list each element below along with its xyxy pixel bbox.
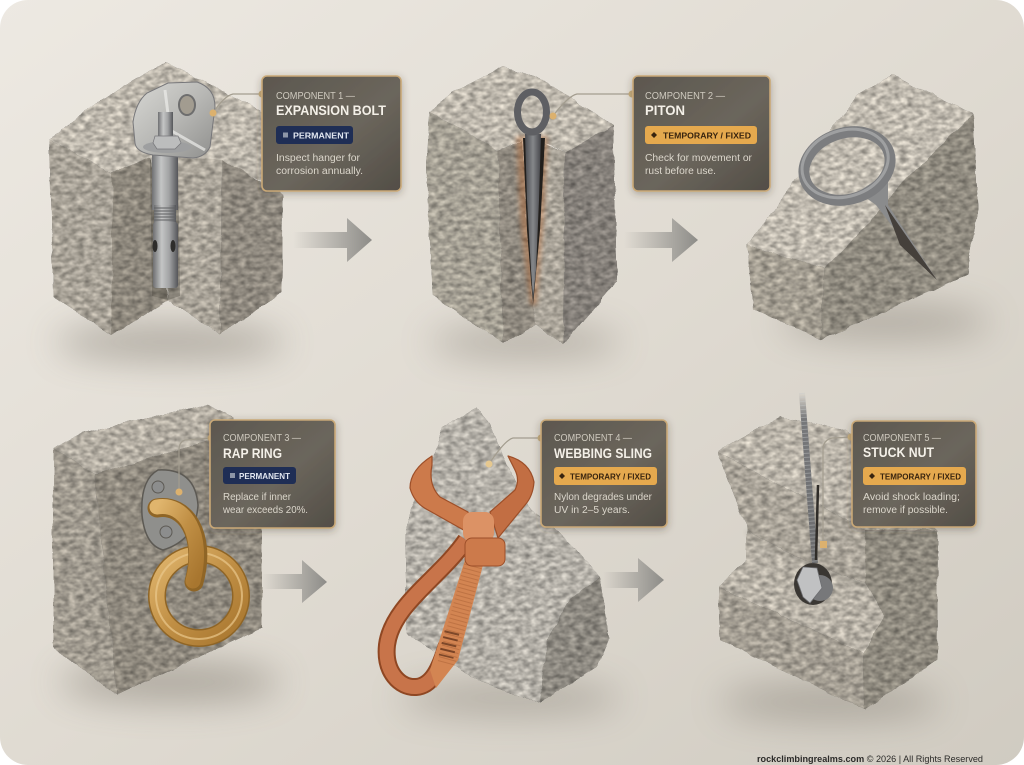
rock shadow bbox=[430, 326, 620, 358]
callout: piton: PITON bbox=[645, 102, 685, 118]
hanging loop bbox=[387, 540, 466, 687]
leader line bbox=[486, 434, 544, 468]
badge: temporary: TEMPORARY / FIXED bbox=[880, 472, 961, 482]
callout: webbing sling: WEBBING SLING bbox=[554, 445, 652, 461]
arrow: step 4 to 5 bbox=[603, 558, 664, 602]
callout: webbing sling: Nylon degrades under bbox=[554, 492, 653, 503]
icon: gold ring bbox=[156, 506, 242, 639]
rock shadow bbox=[400, 682, 620, 714]
callout: stuck nut: remove if possible. bbox=[863, 505, 948, 516]
icon: piton bbox=[518, 92, 546, 298]
callout: rap ring bbox=[210, 420, 335, 528]
callout: rap ring: wear exceeds 20%. bbox=[222, 505, 308, 516]
badge: temporary: TEMPORARY / FIXED bbox=[663, 130, 751, 140]
leader line bbox=[820, 434, 854, 548]
leader line bbox=[550, 90, 636, 120]
knot bbox=[463, 512, 494, 542]
rock shadow bbox=[55, 324, 285, 360]
callout: piton: COMPONENT 2 — bbox=[645, 91, 725, 102]
component 2: piton in crack bbox=[427, 67, 770, 358]
callout: webbing sling: COMPONENT 4 — bbox=[554, 433, 632, 444]
callout: stuck nut: COMPONENT 5 — bbox=[863, 433, 941, 444]
rust stain bbox=[516, 136, 548, 305]
crack shadow bbox=[747, 532, 865, 585]
granite block bbox=[427, 67, 617, 344]
granite block bbox=[50, 62, 284, 335]
icon: piton ring and blade bbox=[793, 118, 937, 280]
callout: expansion bolt: Inspect hanger for bbox=[276, 153, 361, 164]
icon: nut in pocket bbox=[794, 563, 833, 605]
leader line bbox=[176, 434, 214, 496]
badge: temporary: TEMPORARY / FIXED bbox=[570, 472, 651, 482]
arrow: step 2 to 3 bbox=[624, 218, 698, 262]
icon: sling bbox=[387, 456, 534, 688]
badge: permanent: PERMANENT bbox=[239, 471, 291, 481]
badge: permanent: PERMANENT bbox=[293, 130, 350, 140]
granite block bbox=[717, 417, 938, 710]
callout: rap ring: RAP RING bbox=[223, 445, 282, 461]
callout: webbing sling bbox=[541, 420, 667, 527]
arrow: step 3 to 4 bbox=[262, 560, 327, 603]
collar right bbox=[490, 456, 534, 538]
granite spike bbox=[405, 407, 610, 703]
crack bbox=[523, 138, 545, 305]
drilled slot bbox=[150, 158, 180, 300]
icon: hanger plate bbox=[133, 82, 215, 158]
callout: rap ring: Replace if inner bbox=[223, 492, 292, 503]
component 2 detail: piton side view bbox=[747, 75, 990, 340]
callout: rap ring: COMPONENT 3 — bbox=[223, 433, 301, 444]
rock shadow bbox=[780, 304, 990, 340]
rock shadow bbox=[60, 662, 280, 702]
component 3: rap ring bbox=[53, 405, 335, 702]
arrow: step 1 to 2 bbox=[293, 218, 372, 262]
footer credit: rockclimbingrealms.com © 2026 | All Rights Reserved bbox=[757, 754, 983, 765]
callout: webbing sling: UV in 2–5 years. bbox=[554, 505, 630, 516]
callout: expansion bolt: COMPONENT 1 — bbox=[276, 91, 355, 102]
rock shadow bbox=[720, 684, 940, 720]
icon: steel cable bbox=[802, 393, 818, 563]
component 4: webbing sling bbox=[387, 407, 667, 714]
component 5: stuck nut bbox=[717, 393, 976, 720]
callout: expansion bolt: EXPANSION BOLT bbox=[276, 102, 386, 118]
callout: expansion bolt bbox=[262, 76, 401, 191]
leader line bbox=[210, 90, 266, 116]
granite block bbox=[747, 75, 978, 340]
callout: stuck nut bbox=[852, 421, 976, 527]
callout: expansion bolt: corrosion annually. bbox=[276, 166, 363, 177]
icon: bolt shaft bbox=[152, 150, 178, 288]
callout: stuck nut: STUCK NUT bbox=[863, 444, 934, 460]
component 1: expansion bolt bbox=[50, 62, 401, 360]
collar left bbox=[410, 456, 476, 537]
straight strand bbox=[430, 560, 483, 688]
granite block bbox=[53, 405, 262, 695]
icon: anchor plate bbox=[142, 470, 198, 550]
callout: piton: Check for movement or bbox=[645, 153, 753, 164]
callout: stuck nut: Avoid shock loading; bbox=[863, 492, 960, 503]
callout: piton bbox=[633, 76, 770, 191]
callout: piton: rust before use. bbox=[645, 166, 716, 177]
